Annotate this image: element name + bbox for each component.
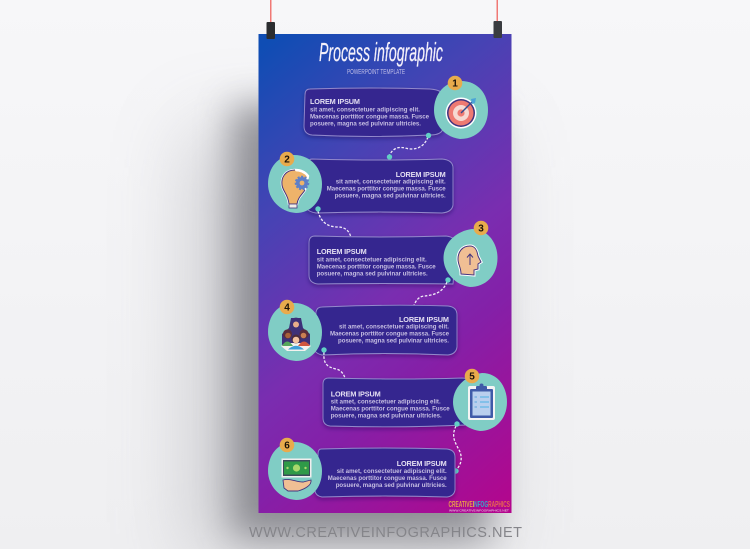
badge 1: 1	[452, 78, 458, 90]
badge 1	[448, 76, 462, 90]
text 2: Maecenas porttitor congue massa. Fusce	[327, 186, 446, 192]
connector 4	[321, 347, 349, 386]
text 2: LOREM IPSUM	[396, 170, 446, 179]
poster shadow	[190, 105, 490, 549]
step 4	[268, 300, 457, 361]
clip right	[494, 21, 502, 38]
text 6: sit amet, consectetuer adipiscing elit.	[337, 468, 447, 475]
text 6: posuere, magna sed pulvinar ultricies.	[336, 482, 447, 489]
text 5: Maecenas porttitor congue massa. Fusce	[331, 406, 450, 412]
clip left	[266, 22, 275, 39]
badge 4: 4	[284, 302, 290, 314]
poster background	[258, 34, 512, 513]
badge 3: 3	[478, 224, 484, 234]
hanging strings	[270, 0, 498, 23]
text 2	[327, 170, 446, 200]
step 5	[323, 369, 507, 431]
circle 3	[444, 229, 498, 287]
icon: target	[446, 98, 476, 128]
connector 1	[387, 133, 431, 160]
connector 5	[453, 421, 461, 474]
text 1: sit amet, consectetuer adipiscing elit.	[310, 106, 420, 114]
text 5: sit amet, consectetuer adipiscing elit.	[331, 398, 441, 406]
logo	[448, 500, 510, 512]
text 4: LOREM IPSUM	[399, 315, 449, 324]
text 3: Maecenas porttitor congue massa. Fusce	[317, 264, 436, 270]
badge 6: 6	[284, 440, 290, 452]
text 6	[328, 459, 447, 489]
text panel 2	[306, 159, 453, 213]
step 3	[309, 221, 498, 287]
text 1	[310, 97, 430, 128]
circle 6	[268, 442, 322, 500]
text 5	[331, 390, 450, 420]
text 1: posuere, magna sed pulvinar ultricies.	[310, 120, 421, 128]
step 2	[268, 152, 453, 213]
text 3: sit amet, consectetuer adipiscing elit.	[317, 256, 427, 264]
connector 2	[315, 206, 354, 242]
text 2: sit amet, consectetuer adipiscing elit.	[336, 178, 446, 186]
icon: clipboard	[468, 384, 495, 420]
badge 2: 2	[284, 154, 290, 166]
text 6: Maecenas porttitor congue massa. Fusce	[328, 475, 447, 482]
text 5: LOREM IPSUM	[331, 390, 381, 398]
text 6: LOREM IPSUM	[397, 459, 447, 468]
badge 5	[465, 369, 479, 383]
text 3: LOREM IPSUM	[317, 247, 367, 256]
badge 5: 5	[469, 372, 475, 382]
badge 4	[280, 300, 294, 314]
subtitle: POWERPOINT TEMPLATE	[347, 69, 405, 76]
text 4: sit amet, consectetuer adipiscing elit.	[339, 324, 449, 330]
text 3	[317, 247, 436, 278]
text 2: posuere, magna sed pulvinar ultricies.	[335, 192, 446, 200]
text 1: LOREM IPSUM	[310, 97, 360, 106]
logo: CREATIVEINFOGRAPHICS	[448, 500, 510, 509]
text panel 3	[309, 236, 456, 284]
step 1	[304, 76, 488, 139]
badge 2	[280, 152, 294, 166]
icon: people	[281, 318, 311, 351]
circle 5	[453, 373, 507, 431]
circle 4	[268, 303, 322, 361]
text 4	[330, 315, 450, 344]
text 3: posuere, magna sed pulvinar ultricies.	[317, 270, 428, 278]
logo: WWW.CREATIVEINFOGRAPHICS.NET	[449, 508, 509, 512]
icon: bulb with gear	[282, 170, 308, 208]
circle 1	[434, 81, 488, 139]
connector 3	[410, 277, 451, 312]
icon: head with arrow	[458, 246, 481, 275]
text panel 1	[304, 88, 444, 136]
text 1: Maecenas porttitor congue massa. Fusce	[310, 114, 430, 120]
circle 2	[268, 155, 322, 213]
badge 6	[280, 438, 294, 452]
text 4: Maecenas porttitor congue massa. Fusce	[330, 330, 450, 338]
icon: money in hand	[282, 458, 312, 491]
title: Process infographic	[319, 37, 443, 67]
text panel 6	[315, 448, 455, 497]
text panel 5	[323, 378, 470, 427]
step 6	[268, 438, 455, 500]
footer url: WWW.CREATIVEINFOGRAPHICS.NET	[249, 525, 522, 541]
badge 3	[474, 221, 488, 235]
text panel 4	[314, 305, 457, 355]
text 5: posuere, magna sed pulvinar ultricies.	[331, 412, 442, 420]
text 4: posuere, magna sed pulvinar ultricies.	[338, 338, 449, 344]
